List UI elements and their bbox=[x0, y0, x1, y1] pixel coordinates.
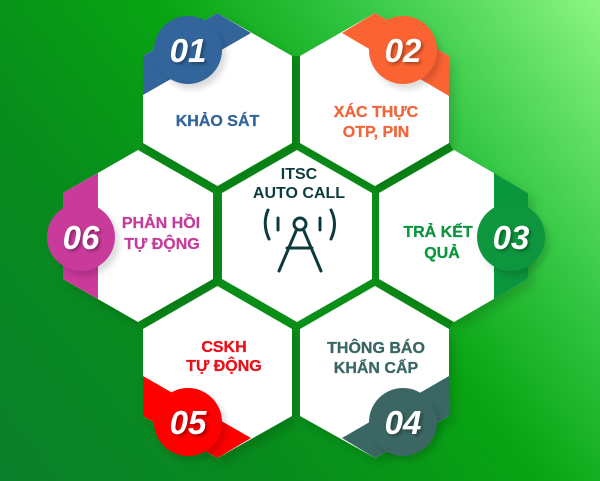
panel: 02 xác thực bbox=[300, 13, 449, 186]
panel: 01 khảo sát bbox=[143, 13, 292, 186]
panel: 01 khảo sát: KHẢO SÁT bbox=[176, 111, 260, 130]
panel: 04 thông báo khẩn cấp: 04 bbox=[385, 404, 421, 441]
panel: 06 phản hồi tự động: 06 bbox=[63, 219, 100, 256]
panel: 03 trả kết quả: QUẢ bbox=[424, 243, 460, 262]
panel: 04 thông báo khẩn cấp: THÔNG BÁO bbox=[327, 338, 425, 357]
panel: 04 thông báo khẩn cấp: KHẨN CẤP bbox=[334, 358, 419, 377]
panel: 06 phản hồi tự động: PHẢN HỒI bbox=[122, 213, 200, 232]
panel: 02 xác thực: OTP, PIN bbox=[343, 124, 409, 141]
heading: itsc auto call: AUTO CALL bbox=[253, 185, 345, 202]
panel: 02 xác thực: 02 bbox=[385, 32, 422, 69]
panel: 03 trả kết quả bbox=[379, 150, 545, 322]
panel: 01 khảo sát: 01 bbox=[170, 32, 206, 69]
panel: 02 xác thực: XÁC THỰC bbox=[334, 102, 419, 121]
panel: center itsc auto call bbox=[222, 150, 372, 322]
panel: 04 thông báo khẩn cấp bbox=[300, 286, 449, 458]
dark green gaps between hexagons bbox=[140, 56, 451, 416]
panel: 06 phản hồi tự động bbox=[47, 150, 213, 322]
panel: 03 trả kết quả: TRẢ KẾT bbox=[403, 222, 473, 241]
panel: 05 cskh tự động: TỰ ĐỘNG bbox=[186, 356, 262, 375]
icon: antenna tower bbox=[265, 210, 334, 271]
heading: itsc auto call bbox=[253, 166, 345, 202]
panel: 05 cskh tự động bbox=[143, 286, 292, 458]
panel: 05 cskh tự động: CSKH bbox=[201, 339, 247, 356]
panel: 05 cskh tự động: 05 bbox=[170, 404, 207, 441]
panel: 06 phản hồi tự động: TỰ ĐỘNG bbox=[124, 234, 200, 253]
panel: 03 trả kết quả: 03 bbox=[493, 219, 529, 256]
heading: itsc auto call: ITSC bbox=[281, 166, 318, 183]
